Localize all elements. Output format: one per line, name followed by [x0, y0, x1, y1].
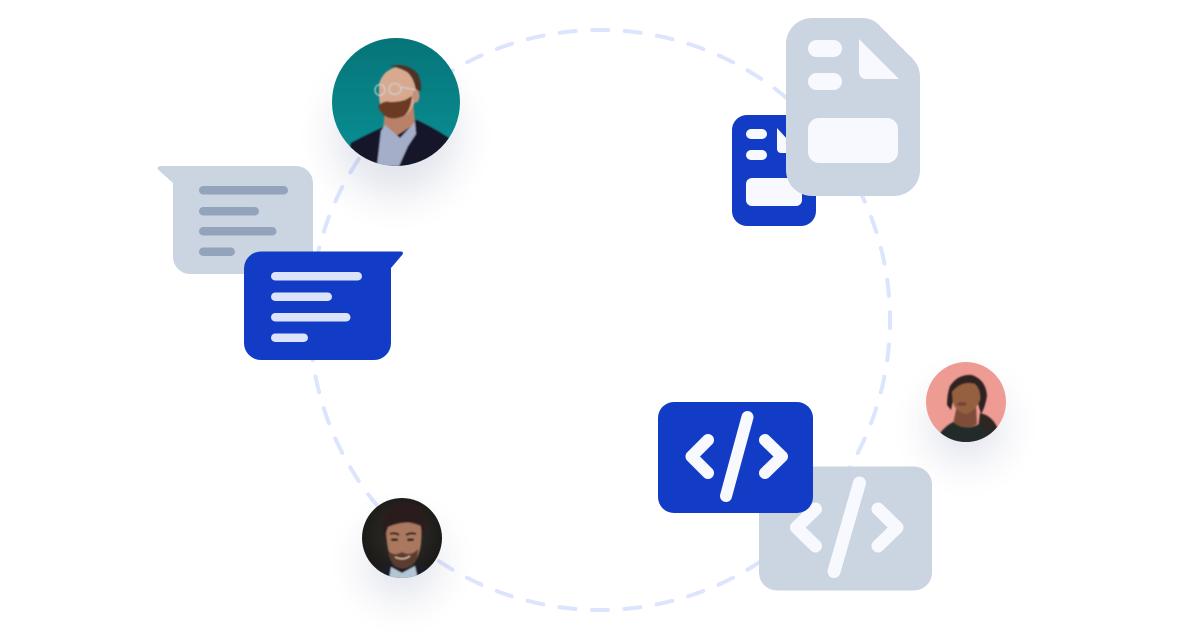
face [379, 67, 417, 117]
hair [382, 504, 425, 537]
chat bubbles [158, 166, 403, 360]
dashed orbit circle [310, 30, 890, 610]
shoulders [376, 564, 428, 576]
beard [378, 96, 412, 118]
hair [390, 65, 421, 91]
stubble [388, 549, 418, 568]
icon: gray code card [759, 466, 932, 590]
avatar: bearded man on dark [362, 498, 442, 600]
mouth [957, 402, 967, 406]
neck [383, 100, 415, 136]
icon: gray chat bubble [158, 166, 313, 274]
code icons [658, 402, 932, 590]
icon: gray document [786, 18, 920, 196]
avatar: woman on coral [926, 362, 1006, 463]
jacket [350, 119, 450, 166]
collar [389, 566, 418, 580]
brows and eyes [390, 533, 416, 535]
hair [947, 375, 987, 414]
glasses [375, 84, 416, 96]
face [386, 522, 421, 567]
shirt [377, 122, 416, 166]
top [940, 421, 988, 442]
icon: blue code card [658, 402, 813, 513]
face [952, 383, 980, 414]
mouth [395, 556, 410, 559]
ear [412, 90, 420, 102]
icon: blue chat bubble [244, 252, 403, 360]
icon: blue document [732, 115, 816, 226]
ponytail [978, 412, 998, 436]
document icons [732, 18, 920, 226]
neck [953, 405, 977, 428]
avatar: man with glasses on teal [332, 38, 460, 196]
